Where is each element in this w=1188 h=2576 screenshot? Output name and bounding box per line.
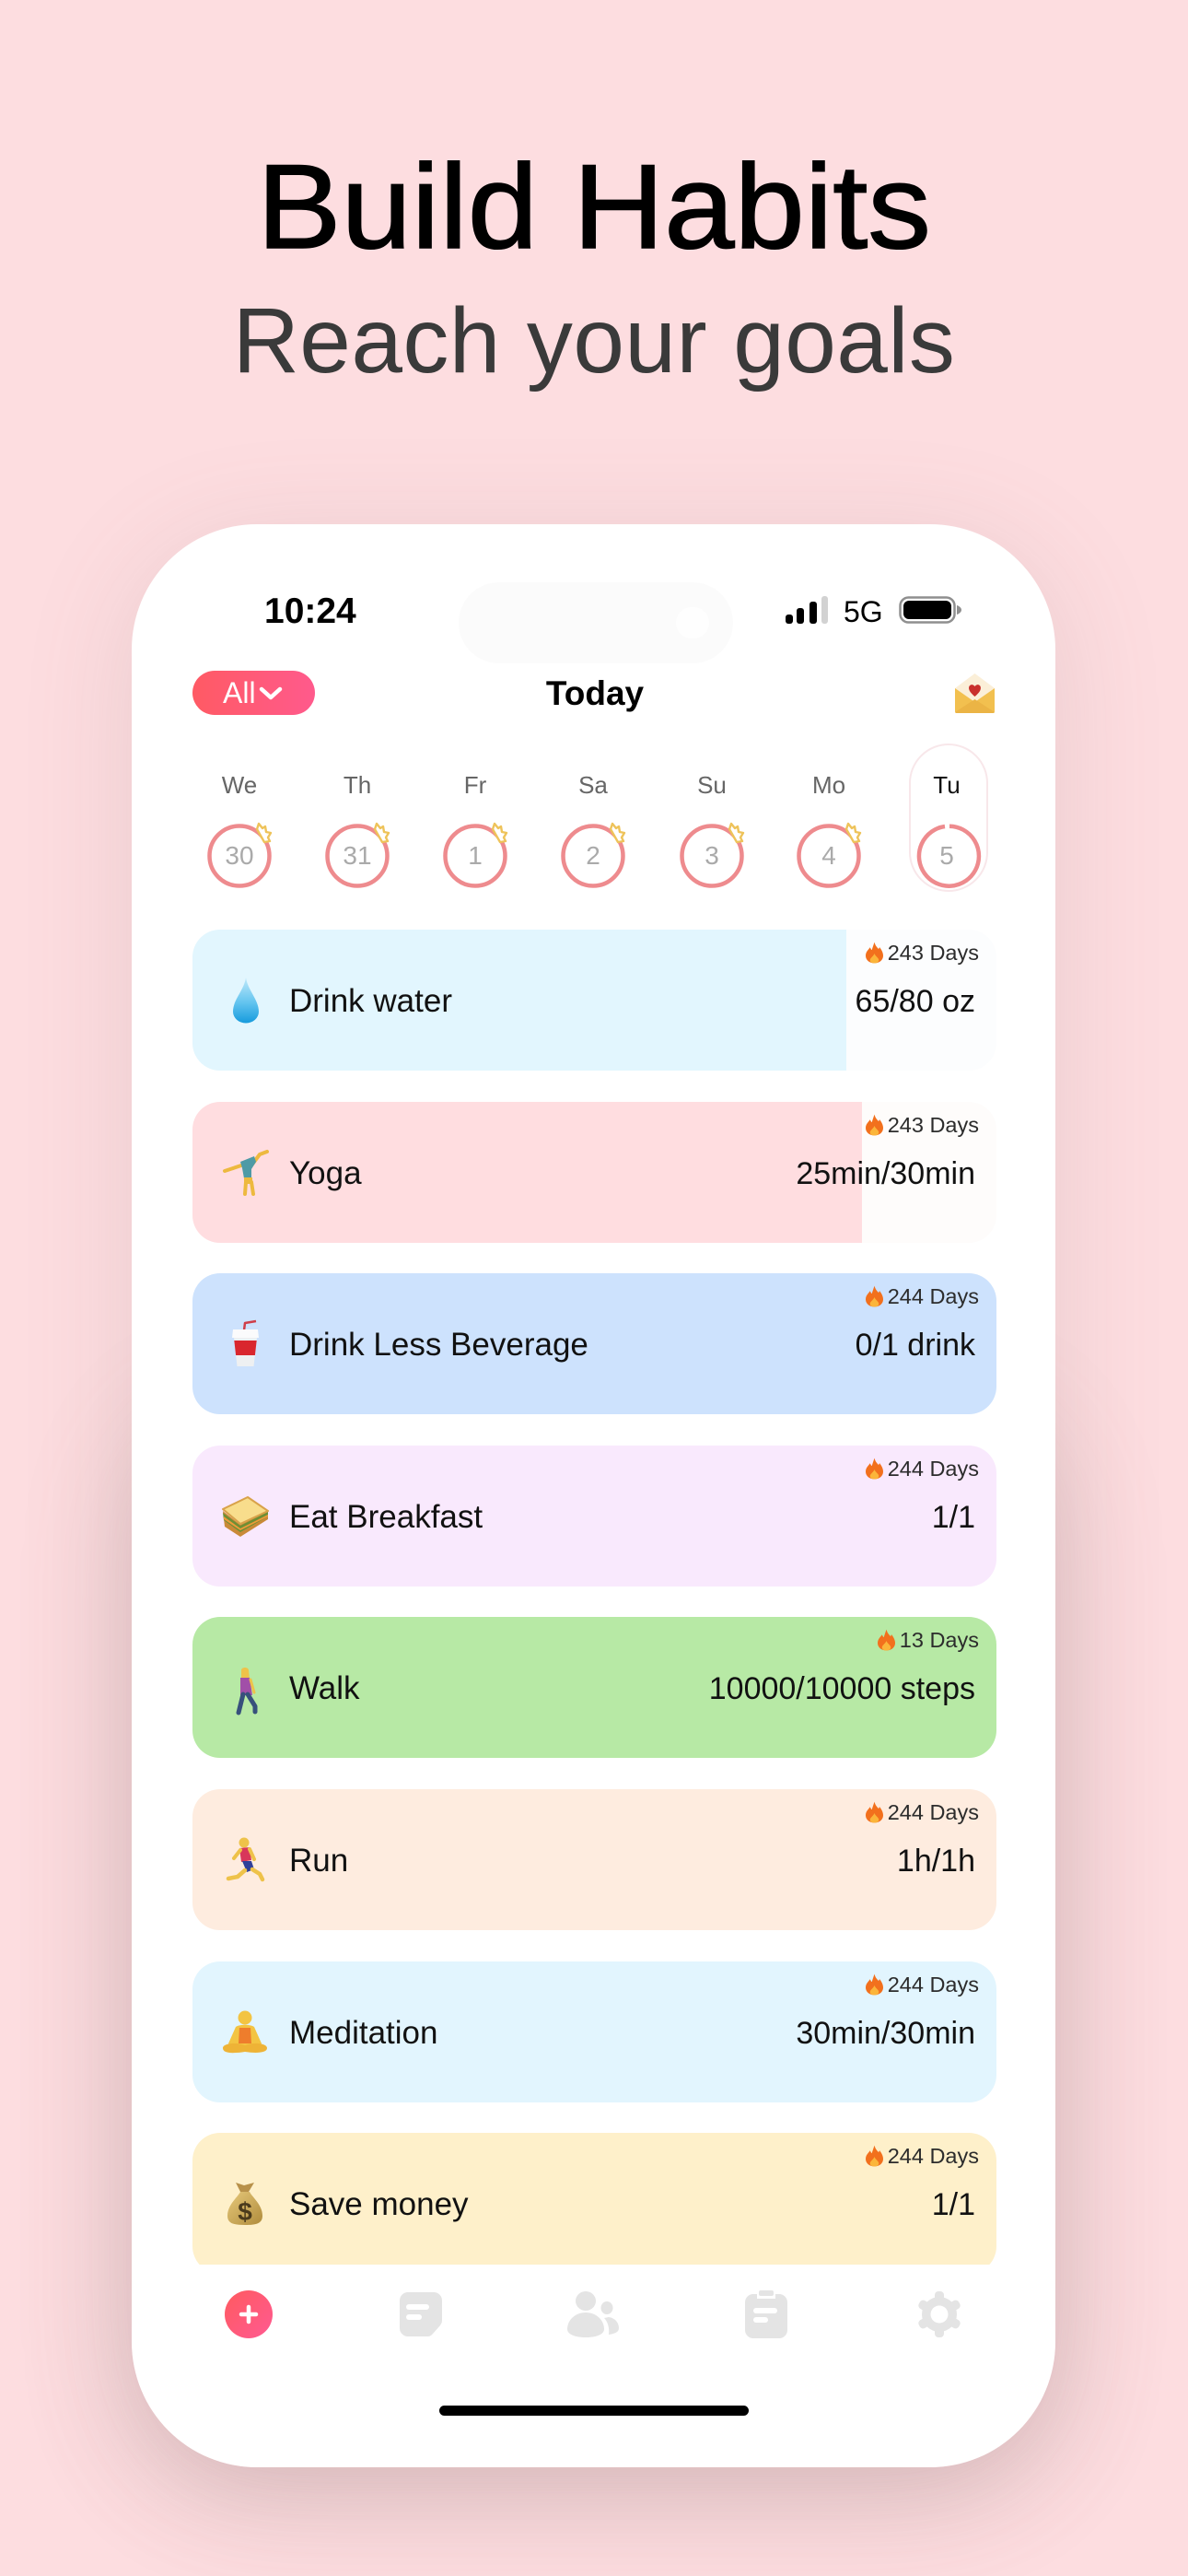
habit card: save money: 244 Days <box>888 2144 979 2168</box>
icon: water drop <box>233 978 259 1023</box>
habit card: run: 244 Days <box>888 1800 979 1824</box>
habit card: meditation: 244 Days <box>888 1973 979 1996</box>
habit card: drink water: Drink water <box>289 983 452 1019</box>
calendar dates: 5 <box>939 841 954 870</box>
calendar dates: 2 <box>586 841 600 870</box>
habit card: drink less beverage <box>192 1273 996 1414</box>
calendar today highlight <box>909 744 988 892</box>
title: Build Habits <box>257 139 931 274</box>
habit card: run <box>192 1789 996 1930</box>
habit card: yoga: 243 Days <box>888 1113 979 1137</box>
tab icon: settings gear <box>918 2291 961 2337</box>
habit list <box>192 930 996 2265</box>
icon: cup with straw <box>232 1319 259 1366</box>
phone frame <box>132 524 1055 2467</box>
status bar time: 10:24 <box>264 591 356 631</box>
home indicator <box>439 2406 749 2416</box>
tab icon: add <box>225 2290 273 2338</box>
icon: sandwich <box>222 1496 269 1537</box>
status bar 5G: 5G <box>844 595 883 628</box>
habit card: drink water: 243 Days <box>888 941 979 965</box>
habit card: eat breakfast: Eat Breakfast <box>289 1499 483 1535</box>
icon: cartwheel <box>223 1150 269 1196</box>
habit card: walk: Walk <box>289 1670 359 1706</box>
icon: meditating person <box>223 2010 267 2053</box>
calendar weekdays: Sa <box>578 771 608 799</box>
calendar weekdays: We <box>222 771 257 799</box>
habit card: drink less beverage: Drink Less Beverage <box>289 1327 588 1363</box>
habit card: walk: 13 Days <box>900 1628 979 1652</box>
heading: today: Today <box>546 674 644 712</box>
habit card: drink water: 65/80 oz <box>856 984 975 1019</box>
filter chevron <box>260 687 282 700</box>
habit card: meditation: Meditation <box>289 2015 437 2051</box>
calendar weekdays: Su <box>697 771 727 799</box>
habit card: eat breakfast <box>192 1446 996 1587</box>
habit card: yoga: 25min/30min <box>796 1156 975 1191</box>
calendar dates: 3 <box>705 841 719 870</box>
habit card: save money: 1/1 <box>932 2187 975 2222</box>
camera dot <box>676 607 709 638</box>
icon: walking woman <box>236 1668 258 1715</box>
tab icon: notes <box>400 2292 442 2336</box>
habit card: run: 1h/1h <box>897 1844 975 1879</box>
tab icon: clipboard <box>745 2290 787 2338</box>
icon: money bag <box>227 2183 262 2226</box>
habit card: meditation <box>192 1961 996 2102</box>
filter pill <box>192 671 315 715</box>
icon: money bag: $ <box>238 2197 252 2226</box>
dynamic island <box>459 582 733 663</box>
filter label: All <box>223 676 256 709</box>
icon: runner <box>227 1837 265 1881</box>
subtitle: Reach your goals <box>233 289 955 392</box>
calendar weekdays: Fr <box>464 771 486 799</box>
calendar dates: 30 <box>225 841 254 870</box>
calendar dates: 31 <box>343 841 372 870</box>
habit card: save money <box>192 2133 996 2274</box>
habit card: walk: 10000/10000 steps <box>709 1671 975 1706</box>
phone lower shadow <box>132 1382 1055 2467</box>
calendar dates: 4 <box>821 841 836 870</box>
habit card: drink water <box>192 930 996 1071</box>
habit card: save money: Save money <box>289 2186 469 2222</box>
status bar battery <box>899 596 961 624</box>
calendar weekdays: Tu <box>933 771 961 799</box>
calendar weekdays <box>221 771 961 799</box>
habit card: run: Run <box>289 1843 348 1879</box>
habit card: yoga <box>192 1102 996 1243</box>
calendar day rings <box>207 822 982 888</box>
calendar dates: 1 <box>468 841 483 870</box>
habit card: eat breakfast: 244 Days <box>888 1457 979 1481</box>
habit card: drink less beverage: 244 Days <box>888 1284 979 1308</box>
habit card: walk <box>192 1617 996 1758</box>
calendar weekdays: Mo <box>812 771 845 799</box>
habit card: eat breakfast: 1/1 <box>932 1500 975 1535</box>
habit card: yoga: Yoga <box>289 1155 362 1191</box>
calendar weekdays: Th <box>344 771 371 799</box>
habit card: meditation: 30min/30min <box>796 2016 975 2051</box>
status bar signal <box>786 596 828 624</box>
tab icon: people <box>567 2291 619 2337</box>
icon: love letter <box>955 673 995 713</box>
calendar dates <box>225 841 954 870</box>
habit card: drink less beverage: 0/1 drink <box>856 1328 975 1363</box>
